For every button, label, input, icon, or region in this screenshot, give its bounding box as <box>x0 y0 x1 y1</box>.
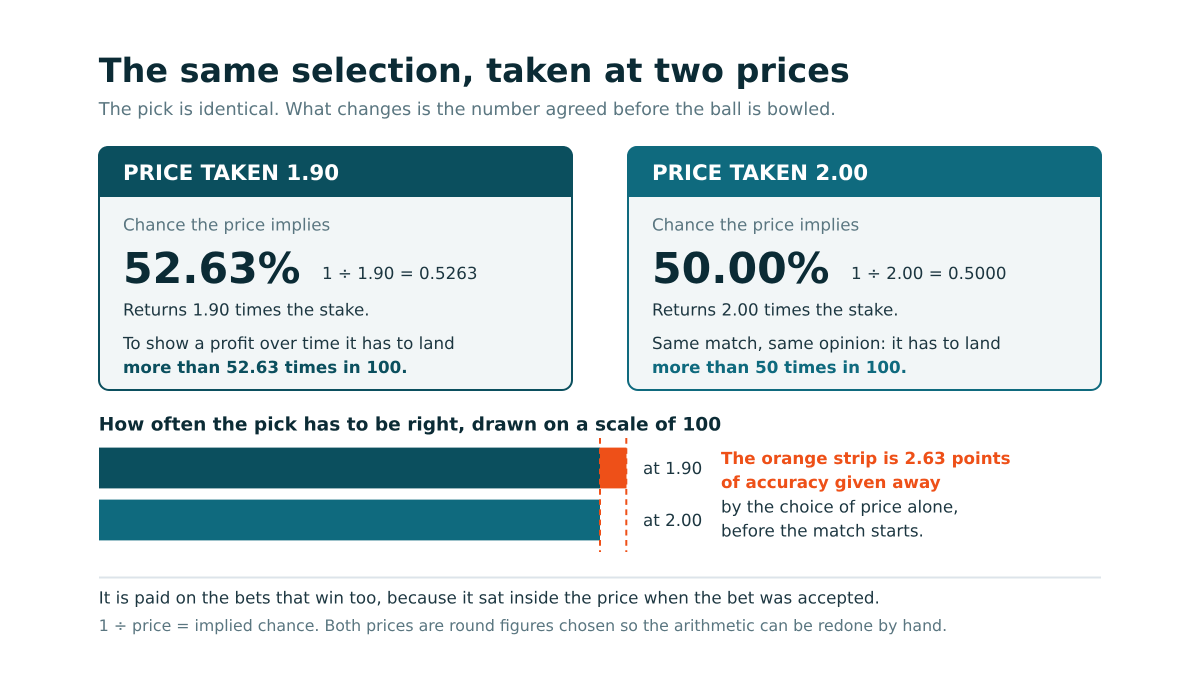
caption 1.90: Chance the price implies <box>123 214 330 234</box>
bar label 2.00: at 2.00 <box>643 510 702 530</box>
explanation 1.90: To show a profit over time it has to land <box>122 333 455 353</box>
caption 2.00: Chance the price implies <box>652 214 859 234</box>
footnote: 1 ÷ price = implied chance. Both prices are round figures chosen so the arithmetic can be redone by hand. <box>99 616 947 635</box>
callout: of accuracy given away <box>721 472 941 492</box>
marker line at 52.63 <box>625 438 627 552</box>
panel: price taken 2.00 <box>627 146 1102 390</box>
footer statement: It is paid on the bets that win too, because it sat inside the price when the bet was accepted. <box>99 588 880 608</box>
returns 2.00: Returns 2.00 times the stake. <box>652 300 899 320</box>
bar label 1.90: at 1.90 <box>643 458 702 478</box>
chart heading: How often the pick has to be right, drawn on a scale of 100 <box>99 414 721 436</box>
panel header 1.90 <box>98 146 573 197</box>
explanation 2.00: Same match, same opinion: it has to land <box>652 333 1001 353</box>
marker line at 50 <box>599 438 601 552</box>
subtitle: The pick is identical. What changes is the number agreed before the ball is bowled. <box>98 100 836 120</box>
big percent 1.90: 52.63% <box>123 244 300 294</box>
formula 2.00: 1 ÷ 2.00 = 0.5000 <box>851 263 1006 283</box>
header label 1.90: PRICE TAKEN 1.90 <box>123 161 339 186</box>
returns 1.90: Returns 1.90 times the stake. <box>123 300 370 320</box>
callout <box>721 448 1011 540</box>
bar chart <box>99 438 702 552</box>
threshold 1.90: more than 52.63 times in 100. <box>123 357 408 377</box>
panel header 2.00 <box>627 146 1102 197</box>
callout: by the choice of price alone, <box>721 496 958 516</box>
callout: before the match starts. <box>721 520 924 540</box>
threshold 2.00: more than 50 times in 100. <box>652 357 907 377</box>
panel: price taken 1.90 <box>98 146 573 390</box>
formula 1.90: 1 ÷ 1.90 = 0.5263 <box>322 263 478 283</box>
title: The same selection, taken at two prices <box>99 51 850 90</box>
orange strip <box>600 448 626 488</box>
big percent 2.00: 50.00% <box>652 244 829 294</box>
callout: The orange strip is 2.63 points <box>721 448 1011 468</box>
bar at 2.00 <box>99 500 600 540</box>
bar at 1.90 <box>99 448 600 488</box>
header label 2.00: PRICE TAKEN 2.00 <box>652 161 868 186</box>
